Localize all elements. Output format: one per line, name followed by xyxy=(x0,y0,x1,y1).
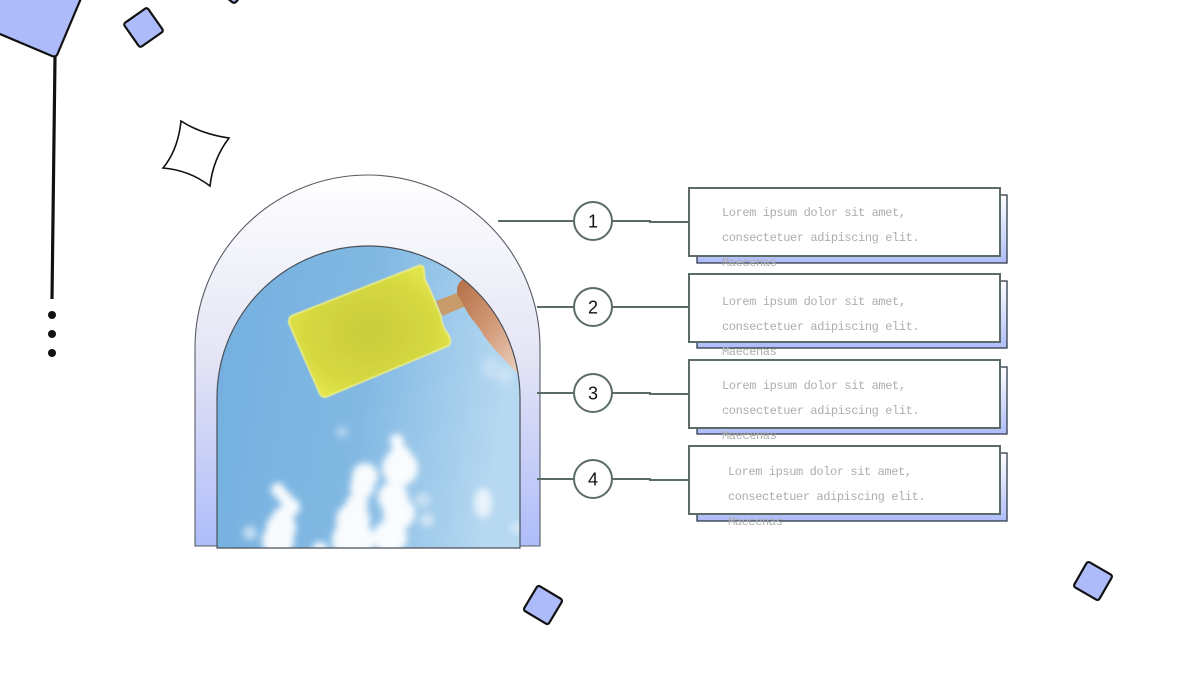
card 3 xyxy=(689,360,1007,434)
decorative diamond: top-left small xyxy=(123,7,164,48)
number badge 2 xyxy=(574,288,612,326)
number badge 3: 3 xyxy=(588,384,598,404)
card 3 text: Lorem ipsum dolor sit amet, xyxy=(722,379,906,393)
stick xyxy=(436,293,466,316)
decorative square: top-left large xyxy=(0,0,82,56)
hanging line with dots xyxy=(48,57,56,357)
number badge 4: 4 xyxy=(588,470,598,490)
number badge 2: 2 xyxy=(588,298,598,318)
card 2 text: Lorem ipsum dolor sit amet, xyxy=(722,295,906,309)
number badge 3 xyxy=(574,374,612,412)
card 4 text: Maecenas xyxy=(728,515,783,529)
card 1 text: Lorem ipsum dolor sit amet, xyxy=(722,206,906,220)
connector 4 xyxy=(537,479,689,480)
connector 3 xyxy=(537,393,689,394)
number badge 1: 1 xyxy=(588,212,598,232)
outer arch xyxy=(195,175,540,546)
inner arch photo: popsicle against sky xyxy=(217,246,532,561)
card 4 text: Lorem ipsum dolor sit amet, xyxy=(728,465,912,479)
decorative diamond: bottom right xyxy=(1073,561,1113,601)
hand xyxy=(456,280,518,374)
connector 2 xyxy=(537,306,689,308)
number badge 4 xyxy=(574,460,612,498)
popsicle xyxy=(289,266,450,397)
card 3 text: consectetuer adipiscing elit. xyxy=(722,404,919,418)
decorative diamond: top clipped xyxy=(226,0,240,3)
card 3 text: Maecenas xyxy=(722,429,777,443)
card 1 text: Maecenas xyxy=(722,256,777,270)
connector 1 xyxy=(498,221,689,222)
card 4 text: consectetuer adipiscing elit. xyxy=(728,490,925,504)
card 1 xyxy=(689,188,1007,263)
outline star xyxy=(163,121,229,186)
card 1 text: consectetuer adipiscing elit. xyxy=(722,231,919,245)
card 2 xyxy=(689,274,1007,348)
clouds xyxy=(243,357,523,561)
decorative diamond: bottom center xyxy=(523,585,563,625)
number badge 1 xyxy=(574,202,612,240)
card 4 xyxy=(689,446,1007,521)
card 2 text: Maecenas xyxy=(722,345,777,359)
card 2 text: consectetuer adipiscing elit. xyxy=(722,320,919,334)
